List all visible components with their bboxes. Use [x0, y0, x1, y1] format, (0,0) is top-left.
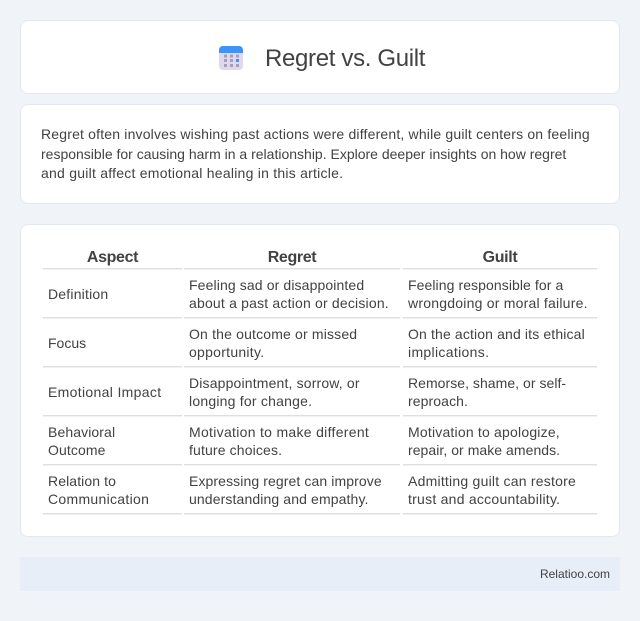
row: Relation to Communication	[48, 473, 149, 507]
table: On the action and its ethical	[408, 326, 585, 342]
footer bar	[20, 557, 620, 591]
table: understanding and empathy.	[189, 491, 369, 507]
table: reproach.	[408, 393, 468, 409]
table: about a past action or decision.	[189, 295, 389, 311]
table: repair, or make amends.	[408, 442, 560, 458]
table: longing for change.	[189, 393, 312, 409]
table: implications.	[408, 344, 489, 360]
row: Behavioral Outcome	[48, 424, 115, 458]
table	[43, 249, 597, 515]
table: Feeling responsible for a	[408, 277, 563, 293]
intro text	[41, 126, 590, 181]
table: Disappointment, sorrow, or	[189, 375, 360, 391]
table: Expressing regret can improve	[189, 473, 382, 489]
title: Regret vs. Guilt	[265, 45, 425, 72]
table: Feeling sad or disappointed	[189, 277, 364, 293]
header: Regret: Regret	[268, 249, 316, 266]
intro card	[20, 104, 620, 204]
footer text: Relatioo.com	[540, 567, 610, 581]
table: Motivation to make different	[189, 424, 369, 440]
header: Guilt: Guilt	[483, 249, 517, 266]
row: Behavioral Outcome: Outcome	[48, 442, 106, 458]
table: Motivation to apologize,	[408, 424, 560, 440]
table: opportunity.	[189, 344, 264, 360]
row: Focus: Focus	[48, 335, 86, 351]
row: Behavioral Outcome: Behavioral	[48, 424, 115, 440]
intro text: Regret often involves wishing past actions were different, while guilt centers on feeling	[41, 126, 590, 142]
intro text: and guilt affect emotional healing in this article.	[41, 165, 343, 181]
table: future choices.	[189, 442, 282, 458]
header card	[20, 20, 620, 94]
header: Aspect: Aspect	[87, 249, 138, 266]
row: Relation to Communication: Relation to	[48, 473, 116, 489]
table: Admitting guilt can restore	[408, 473, 576, 489]
table: wrongdoing or moral failure.	[408, 295, 588, 311]
intro text: responsible for causing harm in a relationship. Explore deeper insights on how regret	[41, 146, 566, 162]
row: Relation to Communication: Communication	[48, 491, 149, 507]
icon: calendar	[219, 46, 243, 70]
table: trust and accountability.	[408, 491, 560, 507]
row: Definition: Definition	[48, 286, 108, 302]
table: On the outcome or missed	[189, 326, 357, 342]
table: Remorse, shame, or self-	[408, 375, 566, 391]
table card	[20, 224, 620, 537]
row: Emotional Impact: Emotional Impact	[48, 384, 161, 400]
